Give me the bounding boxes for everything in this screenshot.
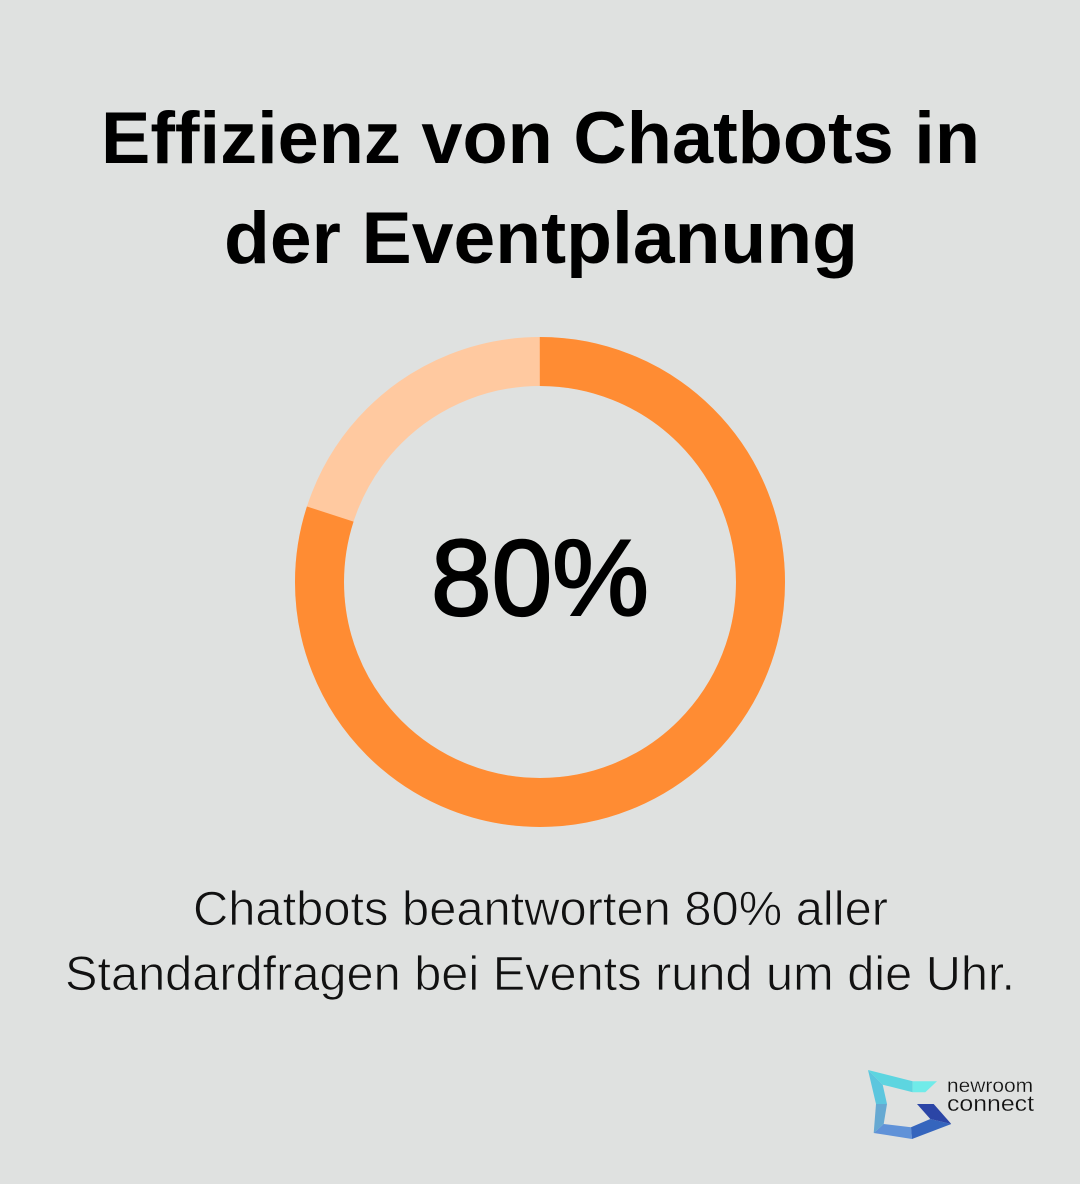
description text: Chatbots beantworten 80% aller [193, 883, 888, 936]
title: Effizienz von Chatbots in [101, 98, 980, 179]
title [101, 98, 980, 279]
logo wordmark: newroom [947, 1076, 1033, 1097]
logo: newroom connect [868, 1070, 1034, 1139]
donut value: 80% [431, 517, 649, 638]
logo wordmark [947, 1076, 1034, 1116]
donut chart: 80 percent [320, 362, 760, 802]
logo icon [868, 1070, 951, 1139]
title: der Eventplanung [224, 198, 858, 279]
description text [65, 883, 1015, 1001]
description text: Standardfragen bei Events rund um die Uhr. [65, 948, 1015, 1001]
logo wordmark: connect [947, 1091, 1034, 1116]
